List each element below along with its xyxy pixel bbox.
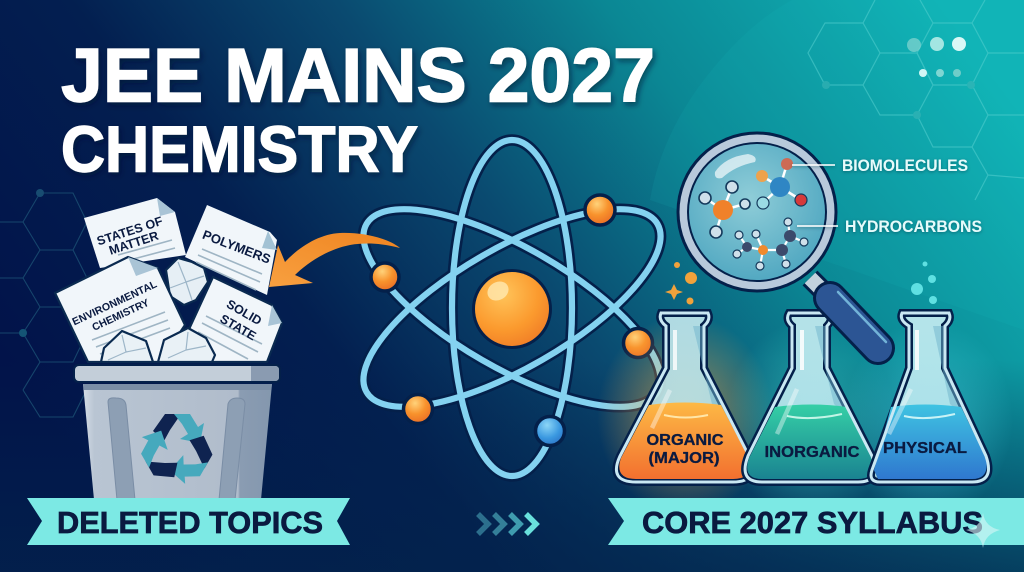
ribbon: deleted topics bbox=[27, 498, 350, 545]
flask: organic: (MAJOR) bbox=[648, 450, 720, 467]
paper: Polymers bbox=[185, 205, 277, 295]
paper: States of Matter bbox=[84, 198, 186, 268]
paper: Solid State: STATE bbox=[218, 312, 258, 343]
label: biomolecules: BIOMOLECULES bbox=[842, 157, 968, 175]
handle bbox=[810, 278, 886, 348]
paper: States of Matter: MATTER bbox=[107, 229, 160, 258]
hexagon pattern: left bbox=[0, 189, 87, 417]
glows behind flasks bbox=[597, 315, 1013, 520]
flask: organic bbox=[616, 313, 752, 482]
flask: inorganic bbox=[745, 313, 875, 482]
curved arrow to bin bbox=[269, 233, 400, 287]
paper: States of Matter: STATES OF bbox=[95, 214, 165, 248]
crumpled ball: bottom left bbox=[101, 331, 153, 362]
title bbox=[61, 34, 655, 186]
ribbon: deleted topics: DELETED TOPICS bbox=[57, 505, 323, 540]
icon: recycle symbol bbox=[134, 414, 218, 488]
cyan bubbles bbox=[911, 262, 937, 304]
bin body bbox=[83, 384, 272, 510]
bin lid bbox=[73, 364, 281, 383]
discarded papers bbox=[55, 198, 282, 362]
flask: inorganic: INORGANIC bbox=[764, 444, 860, 461]
nucleus bbox=[472, 269, 552, 349]
orbit rings bbox=[337, 140, 687, 476]
paper: Environmental Chemistry: CHEMISTRY bbox=[90, 297, 151, 334]
molecule: methane bbox=[699, 181, 750, 238]
electrons bbox=[371, 195, 652, 446]
magnifying glass bbox=[676, 132, 886, 348]
paper: Environmental Chemistry: ENVIRONMENTAL bbox=[71, 278, 159, 328]
paper: Solid State: SOLID bbox=[224, 297, 264, 328]
title: CHEMISTRY bbox=[61, 112, 418, 186]
flask: organic: ORGANIC bbox=[646, 432, 724, 449]
hexagon pattern: top right bbox=[808, 0, 1024, 200]
atom diagram bbox=[337, 140, 687, 476]
ribbon: core 2027 syllabus: CORE 2027 SYLLABUS bbox=[642, 505, 983, 540]
crumpled ball: bottom right bbox=[158, 328, 215, 362]
flask: physical bbox=[871, 313, 989, 482]
paper: Environmental Chemistry bbox=[55, 257, 185, 362]
flask: physical: PHYSICAL bbox=[883, 440, 967, 457]
paper: Polymers: POLYMERS bbox=[200, 227, 273, 267]
orange bubbles and sparkle bbox=[665, 262, 697, 304]
molecule: hydrocarbon bbox=[733, 218, 808, 270]
title: JEE MAINS 2027 bbox=[61, 34, 655, 118]
label: hydrocarbons: HYDROCARBONS bbox=[845, 218, 982, 236]
lens bbox=[676, 132, 838, 292]
bin ribs bbox=[108, 398, 245, 500]
recycling bin bbox=[73, 364, 281, 510]
molecule: biomolecule bbox=[756, 158, 807, 209]
paper: Solid State bbox=[177, 277, 282, 362]
crumpled ball: top bbox=[166, 258, 208, 305]
chevrons bbox=[478, 514, 536, 534]
decorative dots: top right bbox=[907, 37, 966, 77]
ribbon: core 2027 syllabus bbox=[608, 498, 1024, 548]
